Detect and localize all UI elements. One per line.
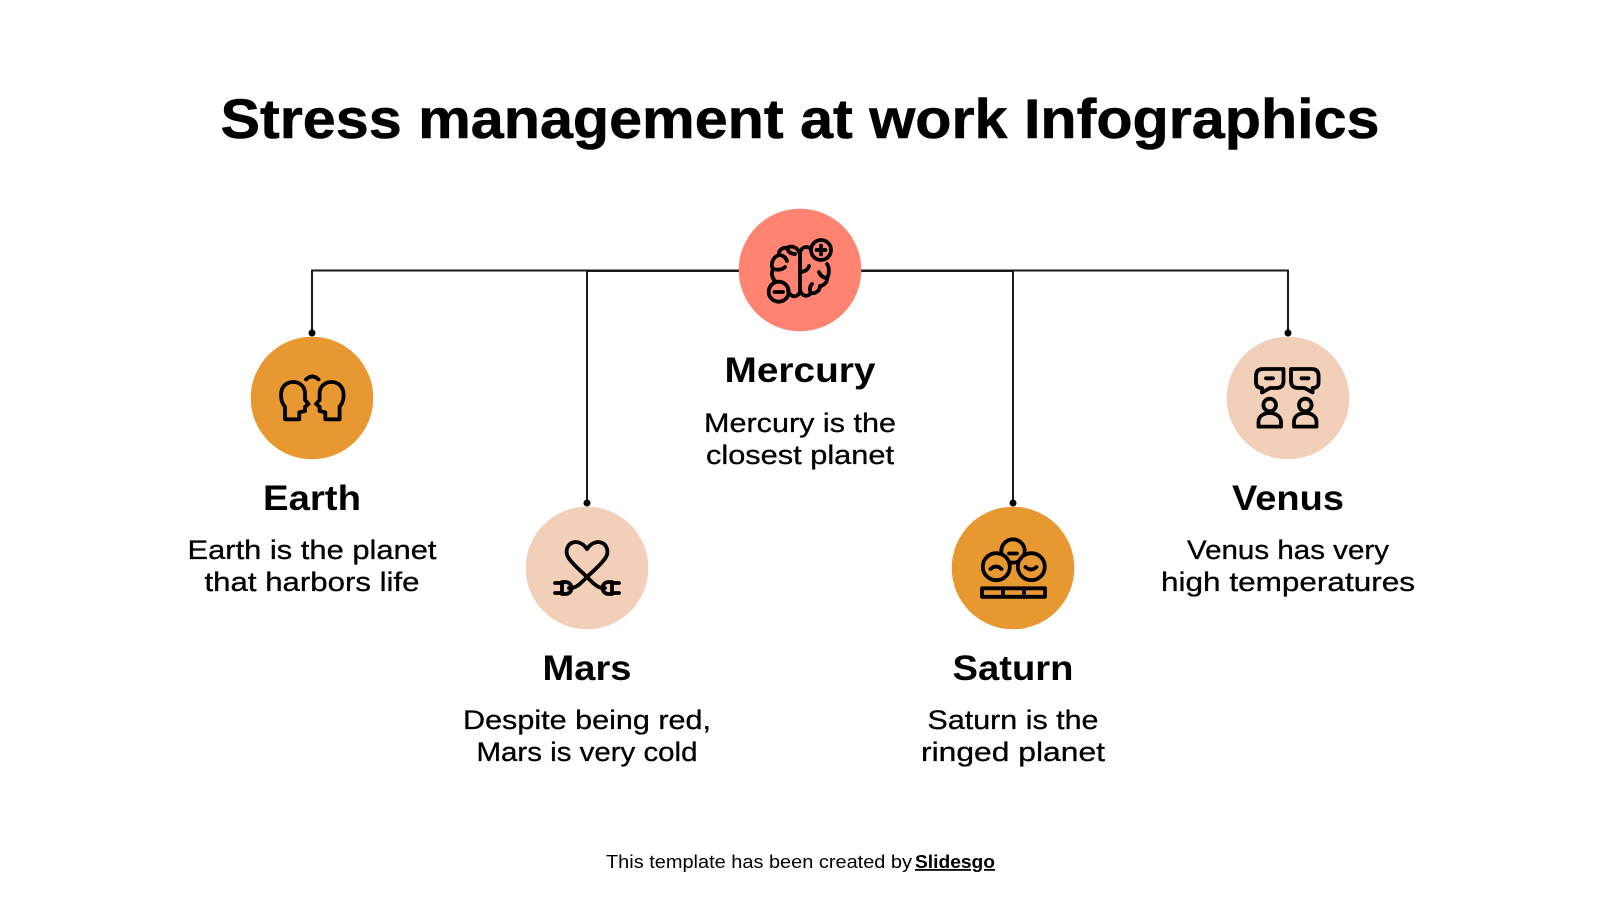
text: Venus description (1161, 535, 1415, 597)
connector end dots (308, 330, 1292, 506)
text: Venus description: Venus has very (1187, 535, 1390, 565)
panel: Venus (1161, 337, 1415, 597)
text: Mercury description: Mercury is the (704, 408, 896, 438)
heading: Earth: Earth (263, 478, 361, 518)
text: Mars description (463, 705, 711, 767)
panel: Mercury (704, 209, 896, 470)
icon: brain with plus and minus (769, 240, 831, 302)
text: Venus description: high temperatures (1161, 567, 1415, 597)
title: Stress management at work Infographics (220, 87, 1380, 150)
text: Saturn description: ringed planet (921, 737, 1106, 767)
text: Mercury description: closest planet (706, 440, 895, 470)
heading: Saturn: Saturn (952, 648, 1074, 688)
icon circle: Mars (526, 507, 648, 629)
footer credit: This template has been created by (606, 852, 912, 872)
panel: Earth (188, 337, 437, 597)
text: Earth description: that harbors life (204, 567, 420, 597)
icon circle: Mercury (739, 209, 861, 331)
icon: two people talking (1256, 369, 1319, 427)
text: Mercury description (704, 408, 896, 470)
icon circle: Saturn (952, 507, 1074, 629)
text: Earth description (188, 535, 437, 597)
icon circle: Venus (1227, 337, 1349, 459)
text: Saturn description: Saturn is the (928, 705, 1098, 735)
text: Mars description: Despite being red, (463, 705, 711, 735)
text: Mars description: Mars is very cold (476, 737, 698, 767)
icon: two heads (281, 376, 344, 419)
panel: Mars (463, 507, 711, 767)
connector lines (312, 270, 1288, 503)
panel: Saturn (921, 507, 1106, 767)
text: Earth description: Earth is the planet (188, 535, 437, 565)
text: Saturn description (921, 705, 1106, 767)
heading: Venus: Venus (1232, 478, 1344, 518)
heading: Mercury: Mercury (724, 350, 876, 390)
icon: heart of plugs (555, 542, 619, 594)
icon circle: Earth (251, 337, 373, 459)
footer credit: Slidesgo (915, 852, 995, 872)
heading: Mars: Mars (542, 648, 632, 688)
icon: three faces on a bar (982, 539, 1045, 597)
